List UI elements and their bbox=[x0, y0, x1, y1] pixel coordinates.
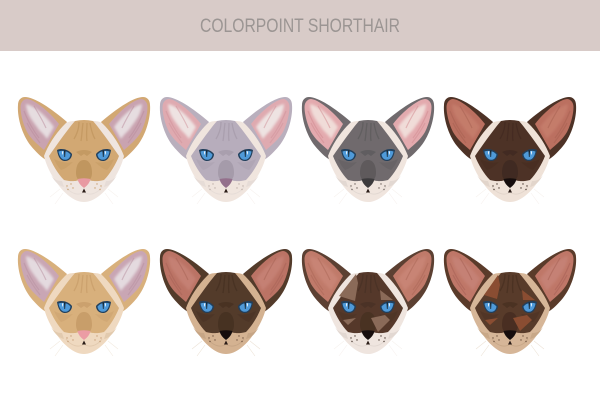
cat 5: cream point bbox=[18, 249, 150, 356]
eyes bbox=[199, 301, 253, 313]
cat 4: seal point bbox=[444, 97, 576, 204]
face mask bbox=[333, 272, 403, 333]
eyes bbox=[341, 149, 395, 161]
face mask bbox=[475, 272, 545, 333]
cat 3: blue point bbox=[302, 97, 434, 204]
cat 6: seal point, tan coat bbox=[160, 249, 292, 356]
eyes bbox=[57, 149, 111, 161]
eyes bbox=[57, 301, 111, 313]
nose and muzzle bbox=[50, 175, 118, 204]
eyes bbox=[199, 149, 253, 161]
ears bbox=[160, 249, 292, 312]
cat 7: tortie point bbox=[302, 249, 434, 356]
ears bbox=[444, 249, 576, 312]
cat 2: lilac point bbox=[160, 97, 292, 204]
nose and muzzle bbox=[192, 327, 260, 356]
cat 1: flame point bbox=[18, 97, 150, 204]
eyes bbox=[483, 149, 537, 161]
nose and muzzle bbox=[50, 327, 118, 356]
head bbox=[186, 273, 266, 354]
ears bbox=[160, 97, 292, 160]
ears bbox=[444, 97, 576, 160]
nose and muzzle bbox=[334, 327, 402, 356]
cat 8: tortie point, tan coat bbox=[444, 249, 576, 356]
face mask bbox=[49, 120, 119, 181]
nose and muzzle bbox=[192, 175, 260, 204]
head bbox=[328, 121, 408, 202]
ears bbox=[18, 249, 150, 312]
head bbox=[470, 121, 550, 202]
nose and muzzle bbox=[476, 175, 544, 204]
ears bbox=[302, 249, 434, 312]
head bbox=[186, 121, 266, 202]
face mask bbox=[333, 120, 403, 181]
rust tortie patches bbox=[484, 275, 535, 331]
face mask bbox=[475, 120, 545, 181]
title: COLORPOINT SHORTHAIR bbox=[200, 16, 400, 37]
head bbox=[470, 273, 550, 354]
nose and muzzle bbox=[334, 175, 402, 204]
eyes bbox=[341, 301, 395, 313]
head bbox=[44, 121, 124, 202]
ears bbox=[18, 97, 150, 160]
head bbox=[328, 273, 408, 354]
light tortie patches bbox=[339, 274, 393, 332]
eyes bbox=[483, 301, 537, 313]
head bbox=[44, 273, 124, 354]
title banner bbox=[0, 0, 600, 51]
face mask bbox=[49, 272, 119, 333]
nose and muzzle bbox=[476, 327, 544, 356]
face mask bbox=[191, 272, 261, 333]
face mask bbox=[191, 120, 261, 181]
ears bbox=[302, 97, 434, 160]
